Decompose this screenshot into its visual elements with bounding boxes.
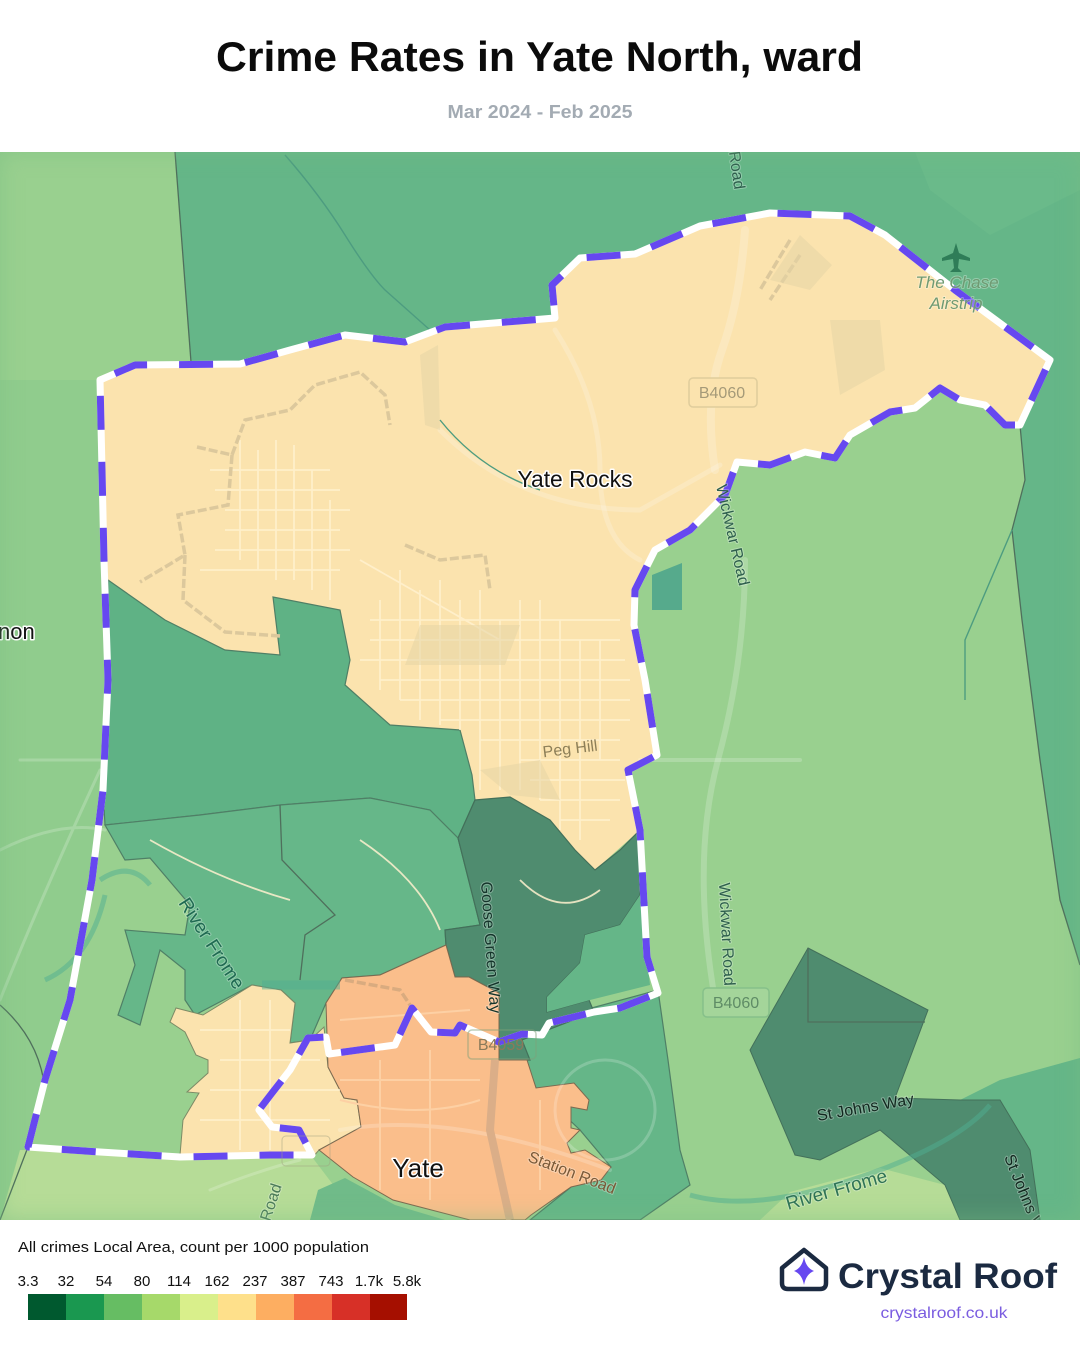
area: Yate centre orange (319, 945, 611, 1220)
legend scale labels (18, 1273, 422, 1290)
road labels: Station Road (526, 1149, 618, 1198)
legend scale labels: 32 (58, 1273, 74, 1290)
choropleth map (0, 152, 1080, 1220)
road shield B4060 north (689, 378, 757, 407)
place label: The Chase Airstrip: Airstrip (929, 294, 982, 313)
road labels: River Frome (174, 894, 248, 993)
logo icon: house with star (782, 1250, 826, 1289)
legend scale labels: 80 (134, 1273, 150, 1290)
place label: Yate: Yate (392, 1153, 444, 1183)
area: central-west mid green (105, 798, 480, 1043)
road labels: St Johns Way (816, 1091, 915, 1125)
legend scale labels: 743 (318, 1273, 344, 1290)
logo wordmark: Crystal Roof (838, 1257, 1057, 1296)
legend scale labels: 54 (96, 1273, 112, 1290)
road shield B4060 south: B4060 (713, 995, 759, 1012)
streets and roads (0, 230, 800, 1190)
legend scale labels: 5.8k (393, 1273, 422, 1290)
area: south centre mid green (522, 990, 690, 1220)
footpaths (140, 240, 800, 1020)
page header (216, 33, 863, 122)
tan land patches (405, 235, 885, 800)
legend scale labels: 1.7k (355, 1273, 384, 1290)
area: Goose Green dark (445, 797, 640, 1060)
area: east dark polygon (750, 948, 1040, 1220)
road labels: Wickwar Road (712, 483, 752, 587)
place label: Yate Rocks: Yate Rocks (518, 466, 632, 492)
map base: light green (0, 152, 1080, 1220)
dual carriageway through town (490, 1060, 510, 1220)
western fringe area (0, 380, 108, 1220)
residential street grid (150, 440, 630, 1150)
place label: The Chase Airstrip (915, 273, 999, 313)
title: Crime Rates in Yate North, ward (216, 33, 863, 80)
region boundary lines (0, 152, 1080, 1220)
legend and logo footer (18, 1239, 1058, 1322)
road labels (174, 150, 1053, 1249)
area: west mid green (103, 580, 475, 838)
road shield B4059 (468, 1030, 536, 1059)
area: north mid-green (175, 152, 1080, 500)
orange area streets (340, 1010, 540, 1200)
legend scale labels: 387 (280, 1273, 306, 1290)
place label: The Chase Airstrip: The Chase (915, 273, 999, 292)
legend scale labels: 114 (167, 1273, 191, 1290)
ward boundary: purple dashes (28, 213, 1050, 1157)
ward boundary: white underlay (28, 213, 1050, 1157)
road shield B4059: B4059 (478, 1037, 524, 1054)
area: south-west lower green (310, 1178, 445, 1220)
water: river and pond (45, 871, 990, 1201)
road shield B4060 north: B4060 (699, 385, 745, 402)
legend colour swatches (28, 1294, 407, 1320)
road shield A432 (282, 1136, 330, 1166)
legend scale labels: 3.3 (18, 1273, 38, 1290)
area: north-east lighter patch (915, 152, 1080, 235)
map edge fade (0, 152, 1080, 1220)
road labels: Goose Green Way (477, 881, 503, 1014)
legend scale labels: 237 (242, 1273, 268, 1290)
ward area: cream north (100, 213, 1050, 870)
area: east of Goose Green mid green (547, 895, 650, 1012)
subtitle: date range: Mar 2024 - Feb 2025 (448, 102, 632, 122)
legend title: All crimes Local Area, count per 1000 population (18, 1239, 369, 1256)
logo url: crystalroof.co.uk (880, 1305, 1009, 1322)
area: south-east lower-right mid green (940, 1058, 1080, 1220)
road shield B4060 south (703, 988, 769, 1017)
place label: Peg Hill: Peg Hill (542, 738, 599, 761)
road labels: River Frome (784, 1166, 890, 1215)
icon: airplane (942, 243, 970, 272)
area: cream south-west (170, 985, 361, 1158)
pond (652, 563, 682, 610)
area: east mid-green strip (1012, 152, 1080, 965)
area: south farmland (0, 1150, 360, 1220)
thin north stream (285, 155, 1012, 700)
road labels: Wickwar Road (715, 882, 737, 986)
area: south-east farmland (760, 1168, 965, 1220)
legend scale labels: 162 (204, 1273, 230, 1290)
